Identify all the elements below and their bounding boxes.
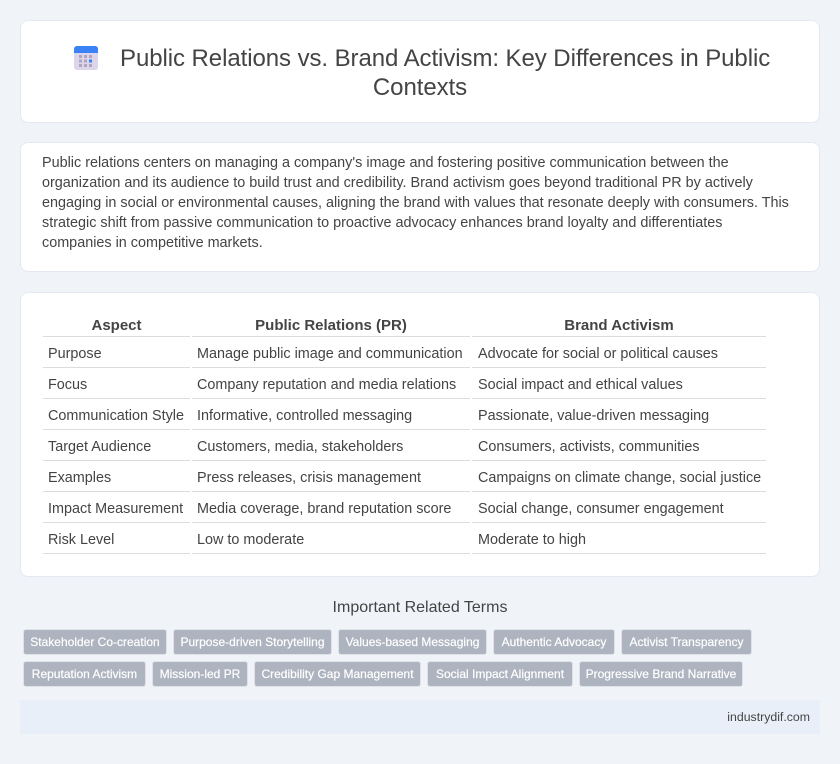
tag: Credibility Gap Management <box>254 661 421 687</box>
text block: introduction: engaging in social or environmental causes, aligning the brand with values that resonate deeply with consumers. This <box>42 195 789 211</box>
tag: Authentic Advocacy <box>493 629 615 655</box>
row: Target Audience: Customers, media, stakeholders <box>197 439 403 455</box>
tag: Values-based Messaging: Values-based Messaging <box>346 635 479 649</box>
tag: Social Impact Alignment: Social Impact Alignment <box>436 667 564 681</box>
row: Communication Style: Informative, controlled messaging <box>197 408 412 424</box>
row: Purpose: Manage public image and communication <box>197 346 463 362</box>
row: Focus: Company reputation and media relations <box>197 377 456 393</box>
tag: Activist Transparency: Activist Transparency <box>629 635 744 649</box>
table header: Aspect: Aspect <box>91 317 142 334</box>
tag: Authentic Advocacy: Authentic Advocacy <box>502 635 606 649</box>
tag: Reputation Activism <box>23 661 146 687</box>
row: Communication Style: Communication Style <box>48 408 184 424</box>
tag: Progressive Brand Narrative <box>579 661 743 687</box>
tag: Reputation Activism: Reputation Activism <box>32 667 137 681</box>
panel: comparison table card <box>20 292 820 577</box>
footer bar <box>20 700 820 734</box>
tag: Purpose-driven Storytelling: Purpose-driven Storytelling <box>180 635 325 649</box>
row: Focus <box>48 377 683 393</box>
row: Risk Level: Risk Level <box>48 532 114 548</box>
tag: Credibility Gap Management: Credibility Gap Management <box>261 667 414 681</box>
tag: Stakeholder Co-creation: Stakeholder Co-creation <box>30 635 160 649</box>
row: Target Audience: Consumers, activists, communities <box>478 439 700 455</box>
text block: introduction: strategic shift from passive communication to proactive advocacy enhances brand loyalty and differentiates <box>42 215 722 231</box>
row: Focus: Social impact and ethical values <box>478 377 683 393</box>
tag: Activist Transparency <box>621 629 752 655</box>
panel: title card <box>20 20 820 123</box>
title <box>120 45 770 101</box>
tag: Social Impact Alignment <box>427 661 573 687</box>
table header: Brand Activism: Brand Activism <box>564 317 674 334</box>
row: Examples <box>48 470 761 486</box>
row: Impact Measurement: Impact Measurement <box>48 501 183 517</box>
row: Target Audience <box>48 439 700 455</box>
tag: Purpose-driven Storytelling <box>173 629 332 655</box>
row: Risk Level <box>48 532 586 548</box>
title: Public Relations vs. Brand Activism: Key Differences in Public <box>120 45 770 72</box>
tag: Values-based Messaging <box>338 629 487 655</box>
row: Purpose: Advocate for social or political causes <box>478 346 718 362</box>
tag: Mission-led PR <box>152 661 248 687</box>
row: Examples: Press releases, crisis management <box>197 470 421 486</box>
heading: related terms: Important Related Terms <box>333 599 507 616</box>
row: Target Audience: Target Audience <box>48 439 151 455</box>
row: Communication Style: Passionate, value-driven messaging <box>478 408 709 424</box>
tag: Stakeholder Co-creation <box>23 629 167 655</box>
row: Impact Measurement: Social change, consumer engagement <box>478 501 724 517</box>
row: Purpose <box>48 346 718 362</box>
text block: introduction: organization and its audience to build trust and credibility. Brand activism goes beyond traditional PR by actively <box>42 175 753 191</box>
row: Examples: Examples <box>48 470 111 486</box>
tag: Mission-led PR: Mission-led PR <box>160 667 240 681</box>
row: Risk Level: Moderate to high <box>478 532 586 548</box>
text block: introduction: Public relations centers on managing a company's image and fostering positive communication between the <box>42 155 729 171</box>
row: Examples: Campaigns on climate change, social justice <box>478 470 761 486</box>
comparison table <box>43 317 766 554</box>
panel: intro text <box>20 142 820 272</box>
footer: source: industrydif.com <box>727 710 810 724</box>
row: Communication Style <box>48 408 709 424</box>
icon: calendar <box>74 46 98 70</box>
row: Risk Level: Low to moderate <box>197 532 304 548</box>
title: Contexts <box>373 74 467 101</box>
row: Focus: Focus <box>48 377 87 393</box>
tag: Progressive Brand Narrative: Progressive Brand Narrative <box>586 667 736 681</box>
row: Purpose: Purpose <box>48 346 102 362</box>
text block: introduction <box>42 155 789 251</box>
row: Impact Measurement: Media coverage, brand reputation score <box>197 501 451 517</box>
table header: Public Relations: Public Relations (PR) <box>255 317 407 334</box>
row: Impact Measurement <box>48 501 724 517</box>
text block: introduction: companies in competitive markets. <box>42 235 263 251</box>
